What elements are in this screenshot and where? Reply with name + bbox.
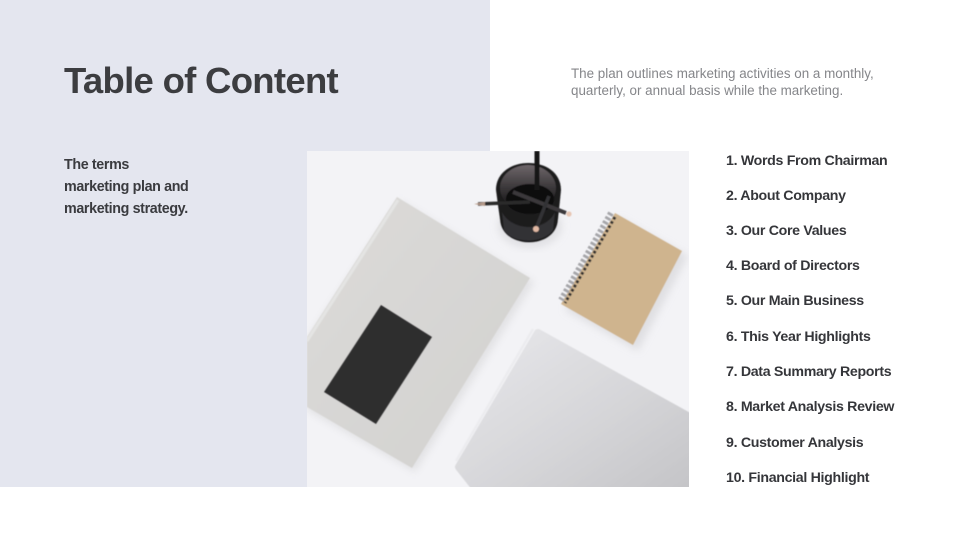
text block: subheading: marketing plan and: [64, 179, 188, 195]
text block: intro description: quarterly, or annual basis while the marketing.: [571, 83, 843, 98]
text block: intro description: The plan outlines marketing activities on a monthly,: [571, 66, 874, 81]
text block: subheading: [64, 157, 188, 217]
item 1: 1. Words From Chairman: [726, 153, 887, 169]
photo background: [307, 151, 689, 487]
title: Table of Content: [64, 60, 338, 101]
item 4: 4. Board of Directors: [726, 258, 860, 274]
photo: desk flat lay: [307, 151, 689, 487]
item 8: 8. Market Analysis Review: [726, 399, 894, 415]
item 6: 6. This Year Highlights: [726, 329, 871, 345]
laptop: [456, 329, 693, 491]
text block: intro description: [571, 66, 874, 98]
item 10: 10. Financial Highlight: [726, 470, 869, 486]
text block: subheading: The terms: [64, 157, 129, 173]
kraft spiral notebook: [561, 213, 688, 351]
item 3: 3. Our Core Values: [726, 223, 846, 239]
black mesh pen holder with pencils: [474, 151, 572, 248]
large grey notebook: [307, 197, 534, 472]
panel: lavender background: [0, 0, 490, 487]
black card: [324, 305, 432, 424]
item 5: 5. Our Main Business: [726, 293, 864, 309]
list: table of contents: [726, 153, 894, 486]
item 7: 7. Data Summary Reports: [726, 364, 891, 380]
spiral binding: [561, 213, 611, 300]
text block: subheading: marketing strategy.: [64, 201, 188, 217]
item 9: 9. Customer Analysis: [726, 435, 863, 451]
item 2: 2. About Company: [726, 188, 846, 204]
